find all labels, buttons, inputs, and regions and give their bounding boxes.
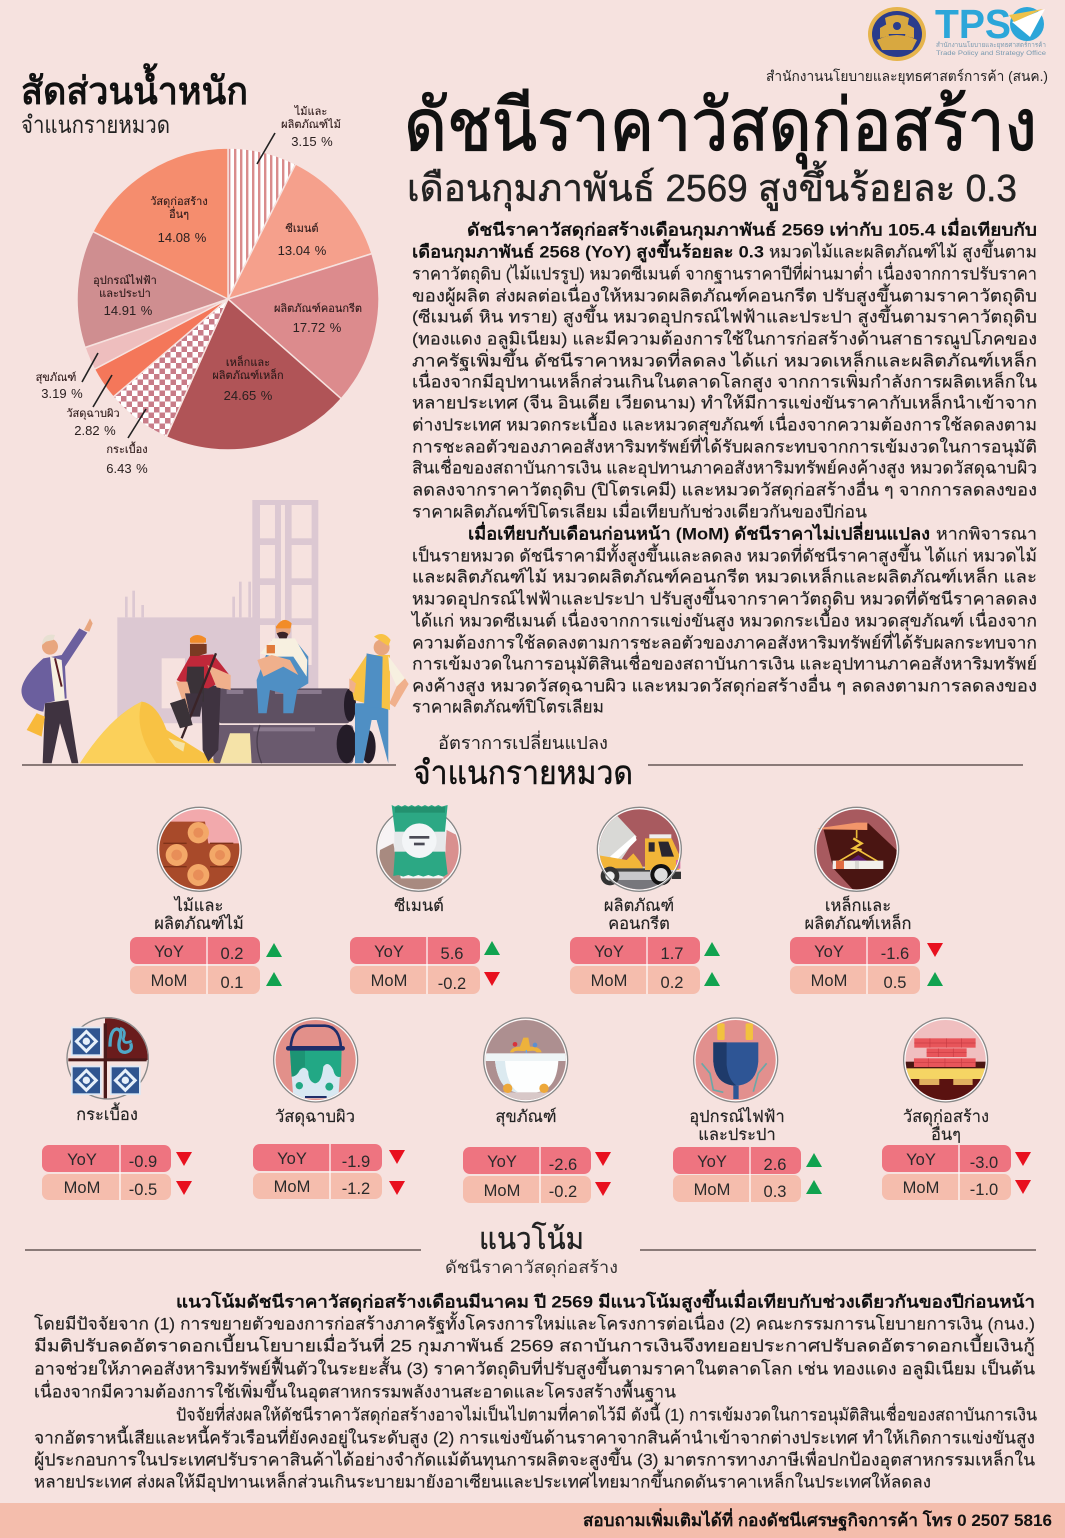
pie chart (77, 148, 379, 450)
body text: trend: เนื่องจากมีความต้องการใช้เพิ่มขึ้นในอุตสาหกรรมพลังงานสะอาดและโครงสร้างพื้นฐาน (34, 1379, 676, 1402)
body text: trend (34, 1288, 1037, 1492)
card: sanitary: -0.2 (549, 1183, 577, 1201)
worker: standing man (349, 634, 409, 763)
card: wood: MoM (151, 972, 187, 990)
card: concrete: 1.7 (661, 945, 683, 963)
pie labels: และประปา (99, 288, 151, 300)
pie labels: 2.82 % (74, 423, 116, 438)
card: tiles: กระเบื้อง (76, 1102, 138, 1124)
card: wood: ไม้และ (173, 896, 223, 915)
pie labels: 6.43 % (106, 461, 148, 476)
card: steel: ผลิตภัณฑ์เหล็ก (804, 913, 912, 933)
worker: sitting man (257, 620, 308, 713)
pie labels: อื่นๆ (169, 206, 189, 221)
organisation name: สำนักงานนโยบายและยุทธศาสตร์การค้า (สนค.) (766, 68, 1048, 85)
pie labels: ซีเมนต์ (285, 222, 319, 235)
pie labels: 24.65 % (224, 388, 273, 403)
icon: plug (694, 1018, 778, 1102)
icon: bricks on pallet (903, 1018, 990, 1102)
body text: trend: มีมติปรับลดอัตราดอกเบี้ยนโยบายเมื่อวันที่ 25 กุมภาพันธ์ 2569 สถาบันการเงินจึงทยอยประกาศปรับลดอัตราดอกเบี้ยเงินกู้ (34, 1333, 1035, 1356)
slice: tiles (113, 299, 228, 437)
card: electrical: อุปกรณ์ไฟฟ้า (689, 1107, 785, 1127)
worker: shovel man (168, 635, 231, 762)
logo: TPSO: Trade Policy and Strategy Office (936, 50, 1046, 57)
body text: main analysis: (ซีเมนต์ หิน ทราย) สูงขึ้น หมวดอุปกรณ์ไฟฟ้าและประปา สูงขึ้นตามราคาวัตถุดิบ (412, 304, 1037, 327)
card: concrete: MoM (591, 972, 627, 990)
card: tiles: YoY (67, 1151, 97, 1169)
pie labels (36, 105, 362, 476)
card: electrical: และประปา (698, 1126, 776, 1144)
body text: main analysis: ภาครัฐเพิ่มขึ้น ดัชนีราคาหมวดที่ลดลง ได้แก่ หมวดเหล็กและผลิตภัณฑ์เหล็ก (412, 348, 1037, 371)
slice: wood (228, 148, 296, 299)
card: cement: YoY (374, 943, 404, 961)
card: coatings (253, 1018, 405, 1199)
card: sanitary: สุขภัณฑ์ (495, 1107, 557, 1127)
body text: main analysis: ดัชนีราคาวัสดุก่อสร้างเดือนกุมภาพันธ์ 2569 เท่ากับ 105.4 เมื่อเทียบกับ (467, 217, 1037, 240)
card: concrete: YoY (594, 943, 624, 961)
card: steel: เหล็กและ (825, 895, 891, 915)
body text: trend: แนวโน้มดัชนีราคาวัสดุก่อสร้างเดือนมีนาคม ปี 2569 มีแนวโน้มสูงขึ้นเมื่อเทียบกับช่วงเดียวกันของปีก่อนหน้า (176, 1288, 1035, 1313)
body text: trend: ปัจจัยที่ส่งผลให้ดัชนีราคาวัสดุก่อสร้างอาจไม่เป็นไปตามที่คาดไว้มี ดังนี้ (1) การเข้มงวดในการอนุมัติสินเชื่อของสถาบันการเงิน (176, 1402, 1037, 1425)
slice: sanitary (85, 299, 228, 369)
heading: by category: จำแนกรายหมวด (413, 754, 633, 791)
body text: trend: อาจช่วยให้ภาคอสังหาริมทรัพย์ฟื้นตัวในระยะสั้น (3) ราคาวัตถุดิบที่ปรับสูงขึ้นตามราคาในตลาดโลก เช่น ทองแดง อลูมิเนียม เป็นต้น (34, 1356, 1035, 1379)
card: cement: ซีเมนต์ (394, 896, 444, 915)
card: concrete (570, 807, 720, 994)
body text: main analysis: หมวดอุปกรณ์ไฟฟ้าและประปา ปรับสูงขึ้นจากราคาวัตถุดิบ หมวดที่ดัชนีราคาลดลง (412, 586, 1037, 609)
body text: trend: ผู้ประกอบการในประเทศปรับราคาสินค้าได้อย่างจำกัดแม้ต้นทุนการผลิตจะสูงขึ้น (3) มาตรการทางภาษีเพื่อปกป้องอุตสาหกรรมเหล็กใน (34, 1447, 1035, 1470)
slice: coatings (94, 299, 228, 397)
body text: main analysis: หากพิจารณา (936, 524, 1037, 543)
card: electrical: 2.6 (764, 1156, 786, 1174)
card: electrical: MoM (694, 1181, 730, 1199)
body text: trend: หลายประเทศ ส่งผลให้มีอุปทานเหล็กส่วนเกินระบายมายังอาเซียนและประเทศไทยมากขึ้นกดดันราคาเหล็กในประเทศให้ลดลง (34, 1469, 931, 1492)
worker: suit man (21, 618, 93, 763)
body text: main analysis: ลดลงจากราคาวัตถุดิบ (ปิโตรเคมี) และหมวดวัสดุก่อสร้างอื่น ๆ จากการลดลงของ (412, 477, 1037, 500)
card: concrete: คอนกรีต (608, 915, 670, 933)
card: cement: MoM (371, 972, 407, 990)
card: other materials: YoY (906, 1151, 936, 1169)
body text: main analysis: เนื่องจากมีอุปทานเหล็กส่วนเกินในตลาดโลกสูง จากการเพิ่มกำลังการผลิตเหล็กใน (412, 369, 1037, 392)
card: other materials: -1.0 (970, 1181, 998, 1199)
body text: main analysis: สินเชื่อของสถาบันการเงิน และอุปทานภาคอสังหาริมทรัพย์คงค้างสูง หมวดวัสดุฉาบผิว (412, 455, 1037, 478)
card: cement: 5.6 (441, 945, 463, 963)
card: cement (350, 805, 500, 994)
subheading: trend: ดัชนีราคาวัสดุก่อสร้าง (445, 1258, 618, 1278)
slice: cement (228, 164, 372, 299)
card: electrical: 0.3 (764, 1183, 786, 1201)
pie labels: 14.91 % (104, 303, 153, 318)
card: tiles: -0.5 (129, 1181, 157, 1199)
card: sanitary (463, 1018, 611, 1203)
pie labels: เหล็กและ (226, 355, 270, 369)
card: other materials: อื่นๆ (931, 1123, 961, 1144)
card: tiles (42, 1018, 192, 1200)
pie labels: 14.08 % (158, 230, 207, 245)
card: cement: -0.2 (438, 975, 466, 993)
icon: bathtub (483, 1018, 570, 1102)
icon: paint bucket (274, 1018, 358, 1102)
body text: main analysis: เดือนกุมภาพันธ์ 2568 (YoY) สูงขึ้นร้อยละ 0.3 (412, 238, 764, 263)
card: other materials: MoM (903, 1179, 939, 1197)
card: steel: YoY (814, 943, 844, 961)
icon: logs (157, 807, 241, 891)
body text: main analysis: ได้แก่ หมวดซีเมนต์ เนื่องจากการแข่งขันสูง หมวดกระเบื้อง หมวดสุขภัณฑ์ เนื่องจาก (410, 608, 1037, 631)
icon: crane hook (815, 807, 900, 893)
card: sanitary: MoM (484, 1182, 520, 1200)
pie labels: ผลิตภัณฑ์คอนกรีต (274, 302, 362, 315)
card: wood: YoY (154, 943, 184, 961)
card: concrete: ผลิตภัณฑ์ (604, 896, 674, 915)
card: other materials: -3.0 (970, 1154, 998, 1172)
slice: other (93, 148, 228, 299)
body text: main analysis: เมื่อเทียบกับเดือนก่อนหน้า (MoM) ดัชนีราคาไม่เปลี่ยนแปลง (468, 521, 930, 543)
body text: main analysis (410, 217, 1037, 716)
body text: trend: จากอัตราหนี้เสียและหนี้ครัวเรือนที่ยังคงอยู่ในระดับสูง (2) การแข่งขันด้านราคาจากสินค้านำเข้าจากต่างประเทศ ทำให้เกิดการแข่งขันสูง (34, 1425, 1035, 1448)
card: tiles: MoM (64, 1179, 100, 1197)
logo: TPSO: สำนักงานนโยบายและยุทธศาสตร์การค้า (936, 41, 1046, 49)
body text: main analysis: เป็นรายหมวด ดัชนีราคามีทั้งสูงขึ้นและลดลง หมวดที่ดัชนีราคาสูงขึ้น ได้แก่ หมวดไม้ (412, 543, 1037, 566)
card: wood: 0.2 (221, 945, 243, 963)
card: wood: ผลิตภัณฑ์ไม้ (154, 914, 244, 933)
trend section rules (25, 1249, 1036, 1251)
subheading: weights: จำแนกรายหมวด (21, 112, 170, 139)
body text: main analysis: ต่างประเทศ หมวดกระเบื้อง และหมวดสุขภัณฑ์ เนื่องจากความต้องการใช้ลดลงตาม (412, 412, 1037, 435)
card: coatings: YoY (277, 1150, 307, 1168)
icon: tiles (67, 1018, 148, 1099)
pie labels: 13.04 % (278, 243, 327, 258)
card: other materials (882, 1018, 1031, 1200)
card: electrical: YoY (697, 1153, 727, 1171)
card: coatings: -1.9 (342, 1153, 370, 1171)
heading: trend: แนวโน้ม (479, 1221, 584, 1256)
heading: rate of change: อัตราการเปลี่ยนแปลง (438, 730, 608, 753)
illustration: construction site (21, 500, 409, 763)
body text: main analysis: การชะลอตัวของภาคอสังหาริมทรัพย์ที่ได้รับผลกระทบจากการเข้มงวดในการอนุมัติ (412, 434, 1037, 457)
footer contact: สอบถามเพิ่มเติมได้ที่ กองดัชนีเศรษฐกิจการค้า โทร 0 2507 5816 (583, 1508, 1052, 1532)
card: steel: 0.5 (884, 974, 906, 992)
body text: main analysis: (ทองแดง อลูมิเนียม) และมีความต้องการใช้ในการก่อสร้างด้านสาธารณูปโภคของ (412, 328, 1037, 349)
icon: mixer truck (597, 807, 683, 891)
pie leader lines (82, 133, 275, 438)
pie labels: วัสดุก่อสร้าง (150, 196, 208, 208)
slice: steel (166, 299, 341, 450)
body text: trend: โดยมีปัจจัยจาก (1) การขยายตัวของการก่อสร้างภาครัฐทั้งโครงการใหม่และโครงการต่อเนื่อง (2) คณะกรรมการนโยบายการเงิน (กนง.) (34, 1311, 1035, 1334)
pie labels: อุปกรณ์ไฟฟ้า (93, 274, 157, 287)
card: wood (130, 807, 282, 994)
logo: government seal (868, 7, 926, 61)
card: concrete: 0.2 (661, 974, 683, 992)
card: sanitary: -2.6 (549, 1156, 577, 1174)
pie labels: สุขภัณฑ์ (36, 371, 76, 384)
footer band (0, 1503, 1065, 1538)
body text: main analysis: ของผู้ผลิต ส่งผลต่อเนื่องให้หมวดผลิตภัณฑ์คอนกรีต ปรับสูงขึ้นตามราคาวัตถุดิบ (412, 283, 1037, 306)
body text: main analysis: และผลิตภัณฑ์ไม้ หมวดผลิตภัณฑ์คอนกรีต หมวดเหล็กและผลิตภัณฑ์เหล็ก และ (412, 565, 1037, 586)
body text: main analysis: ราคาวัตถุดิบ (ไม้แปรรูป) หมวดซีเมนต์ จากฐานราคาปีที่ผ่านมาต่ำ เนื่องจากการปรับราคา (412, 261, 1037, 284)
logo: TPSO: TPS (935, 1, 1011, 47)
body text: main analysis: ราคาผลิตภัณฑ์ปิโตรเลียม (412, 696, 604, 716)
body text: main analysis: ราคาผลิตภัณฑ์ปิโตรเลียม เมื่อเทียบกับช่วงเดียวกันของปีก่อน (412, 499, 867, 521)
pie labels: ผลิตภัณฑ์เหล็ก (212, 368, 284, 382)
card: steel (790, 807, 943, 994)
body text: main analysis: หมวดไม้และผลิตภัณฑ์ไม้ สูงขึ้นตาม (769, 239, 1037, 262)
card: steel: -1.6 (881, 945, 909, 963)
card: coatings: -1.2 (342, 1180, 370, 1198)
card: tiles: -0.9 (129, 1153, 157, 1171)
card: steel: MoM (811, 972, 847, 990)
card: sanitary: YoY (487, 1153, 517, 1171)
subtitle: เดือนกุมภาพันธ์ 2569 สูงขึ้นร้อยละ 0.3 (407, 160, 1017, 211)
slice: concrete (228, 254, 379, 399)
card: other materials: วัสดุก่อสร้าง (903, 1108, 989, 1127)
heading: weights: สัดส่วนน้ำหนัก (21, 63, 248, 113)
pie labels: ผลิตภัณฑ์ไม้ (281, 118, 341, 131)
slice: electrical (77, 232, 228, 348)
logo: TPSO (935, 1, 1046, 57)
body text: main analysis: ความต้องการใช้ลดลงตามการชะลอตัวของภาคอสังหาริมทรัพย์ที่ได้รับผลกระทบจาก (412, 630, 1037, 652)
body text: main analysis: หลายประเทศ (จีน อินเดีย เวียดนาม) ทำให้มีการแข่งขันราคากับเหล็กนำเข้าจาก (412, 391, 1037, 412)
pie labels: วัสดุฉาบผิว (66, 408, 120, 420)
card: coatings: วัสดุฉาบผิว (275, 1108, 355, 1127)
card: electrical (673, 1018, 822, 1202)
pie labels: 17.72 % (293, 320, 342, 335)
card: coatings: MoM (274, 1178, 310, 1196)
body text: main analysis: การเข้มงวดในการอนุมัติสินเชื่อของสถาบันการเงิน และอุปทานภาคอสังหาริมทรัพย์ (412, 651, 1037, 674)
body text: main analysis: คงค้างสูง หมวดวัสดุฉาบผิว และหมวดวัสดุก่อสร้างอื่น ๆ ลดลงตามการลดลงของ (412, 673, 1037, 696)
ground line and section rule (22, 764, 1023, 766)
card: wood: 0.1 (221, 974, 243, 992)
pie labels: ไม้และ (294, 105, 327, 118)
pie labels: 3.15 % (291, 134, 333, 149)
pie labels: กระเบื้อง (106, 441, 148, 456)
pie labels: 3.19 % (41, 386, 83, 401)
icon: cement bag (377, 805, 461, 891)
